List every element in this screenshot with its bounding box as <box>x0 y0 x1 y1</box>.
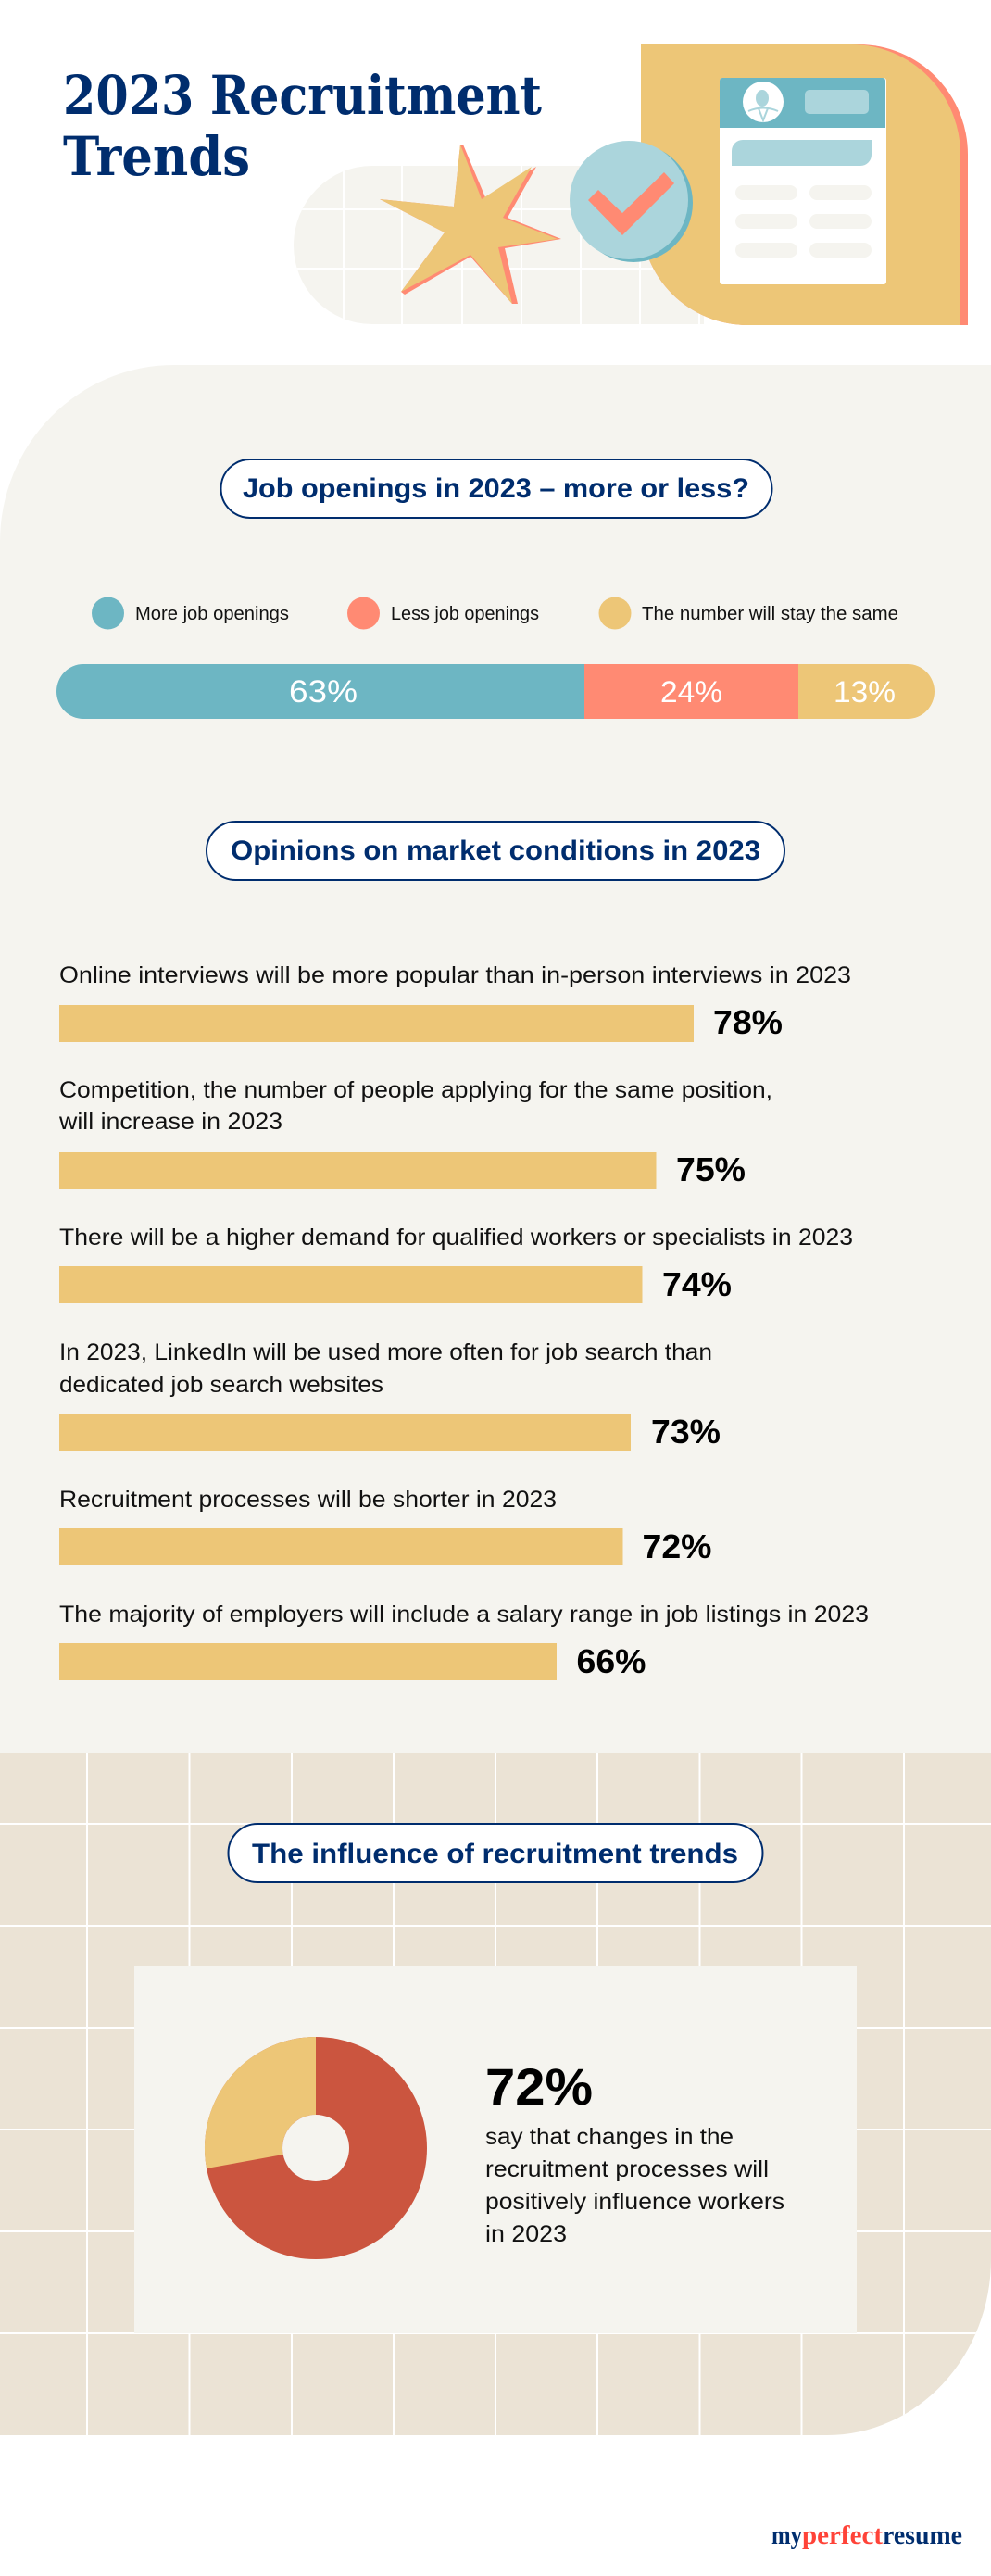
row: salary range <box>59 1602 869 1680</box>
heading: influence <box>228 1824 763 1882</box>
heading: influence: The influence of recruitment trends <box>252 1839 738 1869</box>
panel: influence grid background <box>0 1753 991 2435</box>
logo <box>771 2521 962 2550</box>
stat callout: in 2023 <box>485 2221 567 2247</box>
row: shorter processes: Recruitment processes will be shorter in 2023 <box>59 1487 557 1513</box>
row: salary range: 66% <box>576 1642 646 1680</box>
legend item: same <box>598 597 898 630</box>
row: linkedin: In 2023, LinkedIn will be used more often for job search than <box>59 1339 712 1365</box>
bar chart: market opinions <box>58 962 869 1680</box>
row: linkedin: dedicated job search websites <box>59 1372 383 1398</box>
heading: market conditions: Opinions on market conditions in 2023 <box>231 836 760 866</box>
legend item: more: More job openings <box>135 604 289 624</box>
title <box>63 64 542 188</box>
panel: job openings and market opinions <box>0 365 991 1753</box>
row: online interviews: Online interviews will be more popular than in-person interviews in 2023 <box>59 962 851 988</box>
logo: my <box>771 2521 802 2550</box>
row: linkedin <box>59 1339 721 1451</box>
icon: avatar <box>743 82 784 122</box>
stacked bar chart: 63% <box>289 674 358 710</box>
stat callout: positively influence workers <box>485 2189 784 2215</box>
legend item: less: Less job openings <box>391 604 539 624</box>
stat callout: 72% <box>485 2057 593 2116</box>
icon: star <box>380 145 561 304</box>
row: competition: 75% <box>676 1150 746 1188</box>
row: shorter processes <box>59 1487 711 1565</box>
donut chart <box>205 2037 427 2259</box>
row: competition: Competition, the number of people applying for the same position, <box>59 1077 772 1103</box>
row: salary range: The majority of employers will include a salary range in job listings in 2023 <box>59 1602 869 1627</box>
yellow panel with salmon shadow <box>641 44 968 325</box>
grid pill backdrop <box>294 166 704 324</box>
stacked bar chart: 13% <box>834 675 896 709</box>
row: competition: will increase in 2023 <box>58 1109 282 1135</box>
header illustration <box>294 44 968 325</box>
stat callout: recruitment processes will <box>485 2156 769 2182</box>
legend item: less <box>347 597 539 630</box>
row: shorter processes: 72% <box>643 1527 711 1565</box>
legend item: same: The number will stay the same <box>642 604 898 624</box>
heading: market conditions <box>207 822 784 880</box>
panel: influence card <box>134 1966 857 2333</box>
resume document <box>720 78 886 284</box>
icon: check badge <box>570 141 693 262</box>
title: 2023 Recruitment <box>63 64 542 127</box>
logo: resume <box>883 2521 962 2550</box>
heading: job openings: Job openings in 2023 – more or less? <box>243 473 749 504</box>
row: qualified workers: There will be a higher demand for qualified workers or specialists in 2023 <box>59 1225 853 1250</box>
row: linkedin: 73% <box>651 1413 721 1451</box>
logo: perfect <box>802 2521 884 2550</box>
legend item: more <box>92 597 289 630</box>
stat callout: say that changes in the <box>485 2124 734 2150</box>
row: competition <box>58 1077 772 1189</box>
title: Trends <box>63 125 250 188</box>
row: qualified workers: 74% <box>662 1265 732 1303</box>
row: qualified workers <box>59 1225 853 1303</box>
legend <box>92 597 898 630</box>
row: online interviews <box>59 962 851 1042</box>
stacked bar chart: 24% <box>660 675 722 709</box>
row: online interviews: 78% <box>713 1003 783 1041</box>
stat callout <box>485 2057 784 2247</box>
heading: job openings <box>220 459 772 518</box>
stacked bar chart <box>56 664 935 719</box>
